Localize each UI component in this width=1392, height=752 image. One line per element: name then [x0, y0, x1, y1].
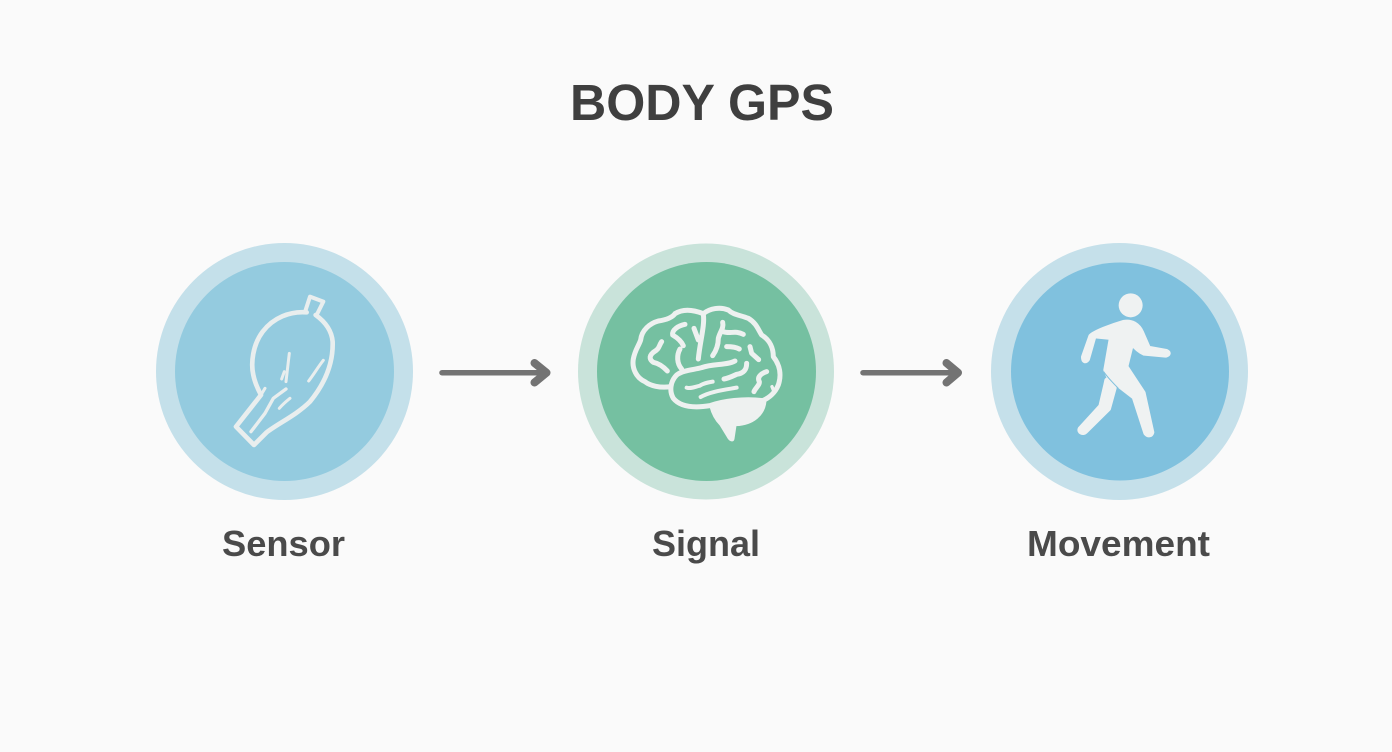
label: Sensor: Sensor	[222, 523, 345, 564]
signal inner disc	[597, 262, 816, 481]
title: BODY GPS	[570, 74, 834, 131]
label: Movement: Movement	[1027, 523, 1210, 564]
movement outer ring	[991, 243, 1248, 500]
arrow: signal to movement	[863, 363, 958, 382]
step: signal	[578, 244, 834, 564]
step: sensor	[156, 243, 413, 564]
label: Signal: Signal	[652, 523, 760, 564]
icon: sensor muscle spindle	[236, 297, 333, 445]
arrow: sensor to signal	[442, 363, 546, 382]
sensor inner disc	[175, 262, 394, 481]
movement inner disc	[1011, 262, 1229, 480]
icon: brain	[633, 308, 780, 441]
step: movement	[991, 243, 1248, 564]
sensor outer ring	[156, 243, 413, 500]
signal outer ring	[578, 244, 834, 500]
icon: walking person	[1080, 293, 1168, 435]
cerebellum	[710, 401, 766, 441]
